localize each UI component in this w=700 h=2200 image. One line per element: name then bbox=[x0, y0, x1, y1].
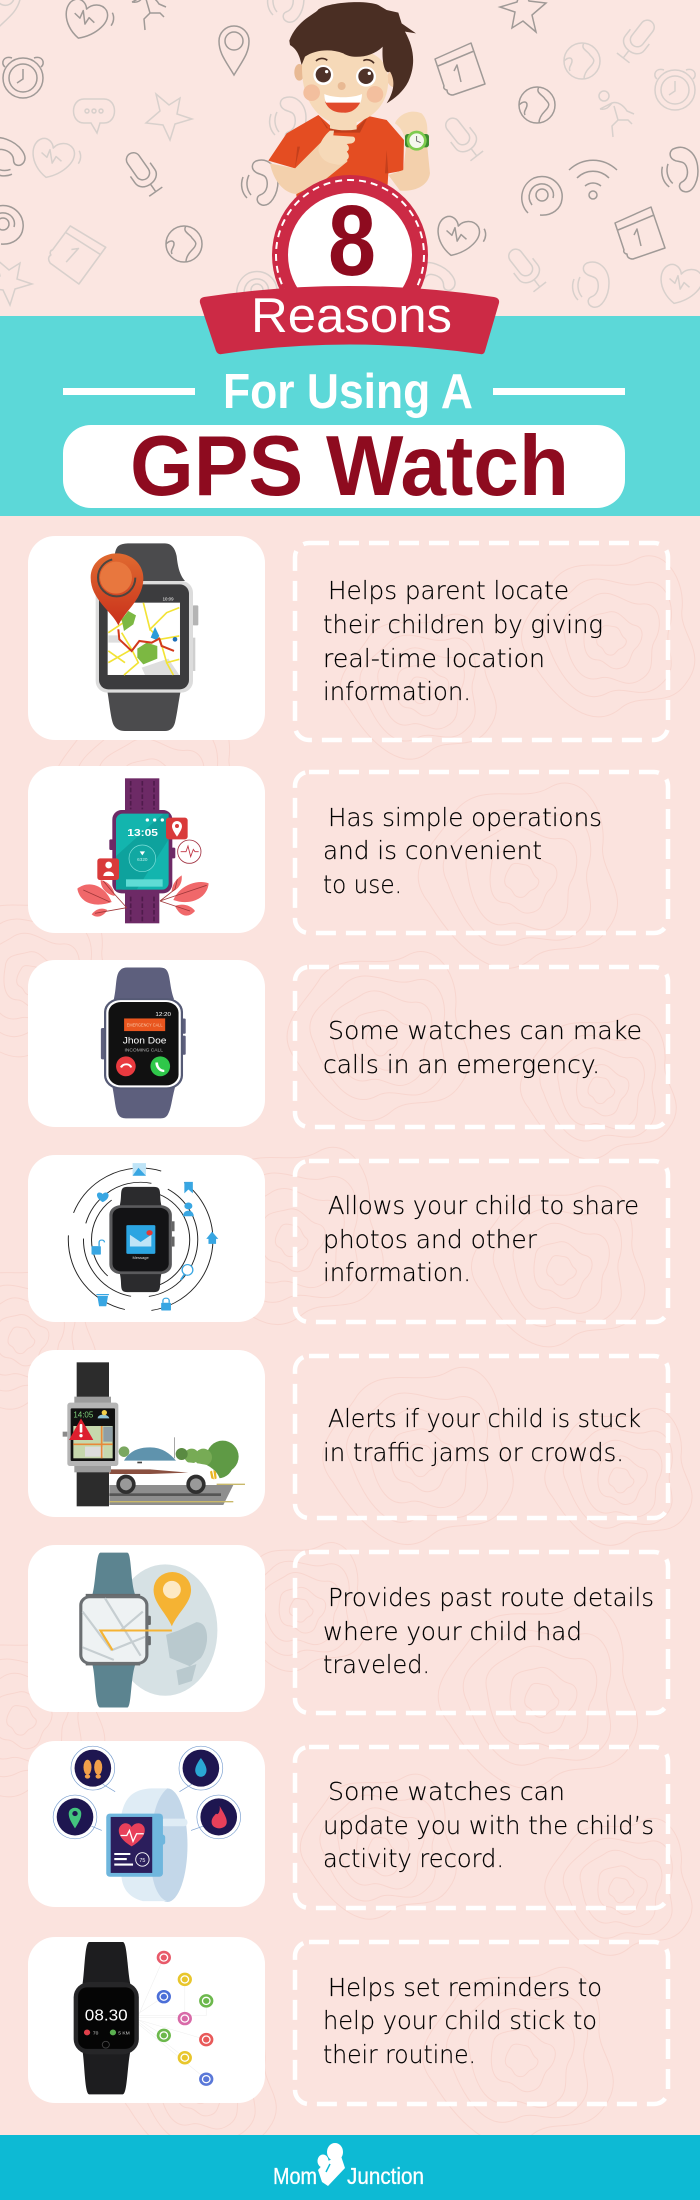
icon: watch with orbiting share icons bbox=[68, 1163, 218, 1311]
text box 2: to use. bbox=[323, 870, 402, 899]
text box 6 bbox=[295, 1552, 668, 1713]
text box 8: help your child stick to bbox=[323, 2006, 597, 2035]
header background bbox=[0, 0, 700, 316]
logo: MomJunction bbox=[273, 2143, 424, 2189]
icon: purple smartwatch with leaves bbox=[77, 778, 209, 923]
text box 1: information. bbox=[323, 677, 471, 706]
text box 2 bbox=[295, 772, 668, 933]
banner text: Reasons bbox=[251, 289, 452, 343]
card 3 bbox=[28, 960, 265, 1127]
text box 1 bbox=[295, 543, 668, 740]
text box 2: Has simple operations bbox=[328, 803, 602, 832]
icon: black watch with reminder icons bbox=[74, 1942, 212, 2094]
doodle icon pattern bbox=[0, 0, 700, 310]
text box 6: where your child had bbox=[323, 1617, 582, 1646]
icon: fitness watch with activity bubbles bbox=[53, 1746, 241, 1902]
text box 7 bbox=[295, 1747, 668, 1908]
icon: watch with emergency call screen: Jhon Doe bbox=[123, 1036, 167, 1046]
card 6 bbox=[28, 1545, 265, 1712]
footer band bbox=[0, 2135, 700, 2200]
icon: watch with route and map pin over globe bbox=[81, 1553, 217, 1708]
icon: watch with emergency call screen: EMERGENCY CALL bbox=[127, 1023, 162, 1028]
icon: watch with alert and car in traffic: 14:05 bbox=[73, 1410, 94, 1419]
icon: fitness watch with activity bubbles: 75 bbox=[139, 1858, 145, 1864]
text box 1: real-time location bbox=[323, 644, 545, 673]
title text: GPS Watch bbox=[130, 419, 569, 514]
illustration: boy pointing at wristwatch bbox=[268, 2, 430, 200]
card 4 bbox=[28, 1155, 265, 1322]
icon: watch with alert and car in traffic bbox=[63, 1362, 245, 1506]
text box 7: Some watches can bbox=[328, 1777, 565, 1806]
text box 6: Provides past route details bbox=[328, 1583, 654, 1612]
subtitle: For Using A bbox=[63, 365, 625, 419]
teal title band bbox=[0, 316, 700, 516]
card 8 bbox=[28, 1937, 265, 2103]
card 2 bbox=[28, 766, 265, 933]
icon: watch with emergency call screen: 12:20 bbox=[155, 1012, 171, 1018]
icon: purple smartwatch with leaves: 13:05 bbox=[127, 828, 159, 839]
icon: purple smartwatch with leaves: 6320 bbox=[137, 857, 148, 862]
card 5 bbox=[28, 1350, 265, 1517]
icon: black watch with reminder icons: 08.30 bbox=[85, 2007, 128, 2025]
text box 5: Alerts if your child is stuck bbox=[328, 1404, 641, 1433]
logo: MomJunction: Mom bbox=[273, 2163, 317, 2189]
card 7 bbox=[28, 1741, 265, 1907]
icon: watch with orbiting share icons: Message bbox=[132, 1256, 149, 1260]
text box 1: Helps parent locate bbox=[328, 576, 569, 605]
text box 7: update you with the child’s bbox=[323, 1811, 654, 1840]
text box 8 bbox=[295, 1942, 668, 2104]
text box 6: traveled. bbox=[323, 1650, 430, 1679]
numeral 8: 8 bbox=[328, 185, 376, 297]
icon: watch with emergency call screen bbox=[101, 968, 186, 1118]
text box 3: calls in an emergency. bbox=[323, 1050, 600, 1079]
text box 3 bbox=[295, 967, 668, 1127]
text box 3: Some watches can make bbox=[328, 1016, 642, 1045]
text box 5: in traffic jams or crowds. bbox=[323, 1438, 624, 1467]
text box 8: their routine. bbox=[323, 2040, 476, 2069]
text box 4: information. bbox=[323, 1258, 471, 1287]
subtitle text: For Using A bbox=[223, 365, 473, 419]
icon: watch with emergency call screen: INCOMING CALL bbox=[125, 1048, 163, 1054]
text box 4 bbox=[295, 1161, 668, 1322]
text box 4: photos and other bbox=[323, 1225, 538, 1254]
background contour pattern bbox=[0, 530, 700, 2182]
text box 7: activity record. bbox=[323, 1844, 504, 1873]
text box 5 bbox=[295, 1356, 668, 1518]
badge: number 8 bbox=[272, 175, 428, 335]
banner: Reasons bbox=[200, 286, 499, 354]
icon: black watch with reminder icons: 5 KM bbox=[118, 2031, 130, 2036]
icon: black watch with reminder icons: 70 bbox=[93, 2031, 99, 2036]
icon: watch with map and location pin bbox=[91, 543, 198, 731]
icon: watch with map and location pin: 10:09 bbox=[163, 596, 174, 601]
text box 4: Allows your child to share bbox=[328, 1191, 639, 1220]
title pill: GPS Watch bbox=[63, 419, 625, 514]
text box 1: their children by giving bbox=[323, 610, 603, 639]
text box 8: Helps set reminders to bbox=[328, 1973, 602, 2002]
logo: MomJunction: Junction bbox=[347, 2163, 424, 2189]
text box 2: and is convenient bbox=[323, 836, 542, 865]
card 1 bbox=[28, 536, 265, 740]
